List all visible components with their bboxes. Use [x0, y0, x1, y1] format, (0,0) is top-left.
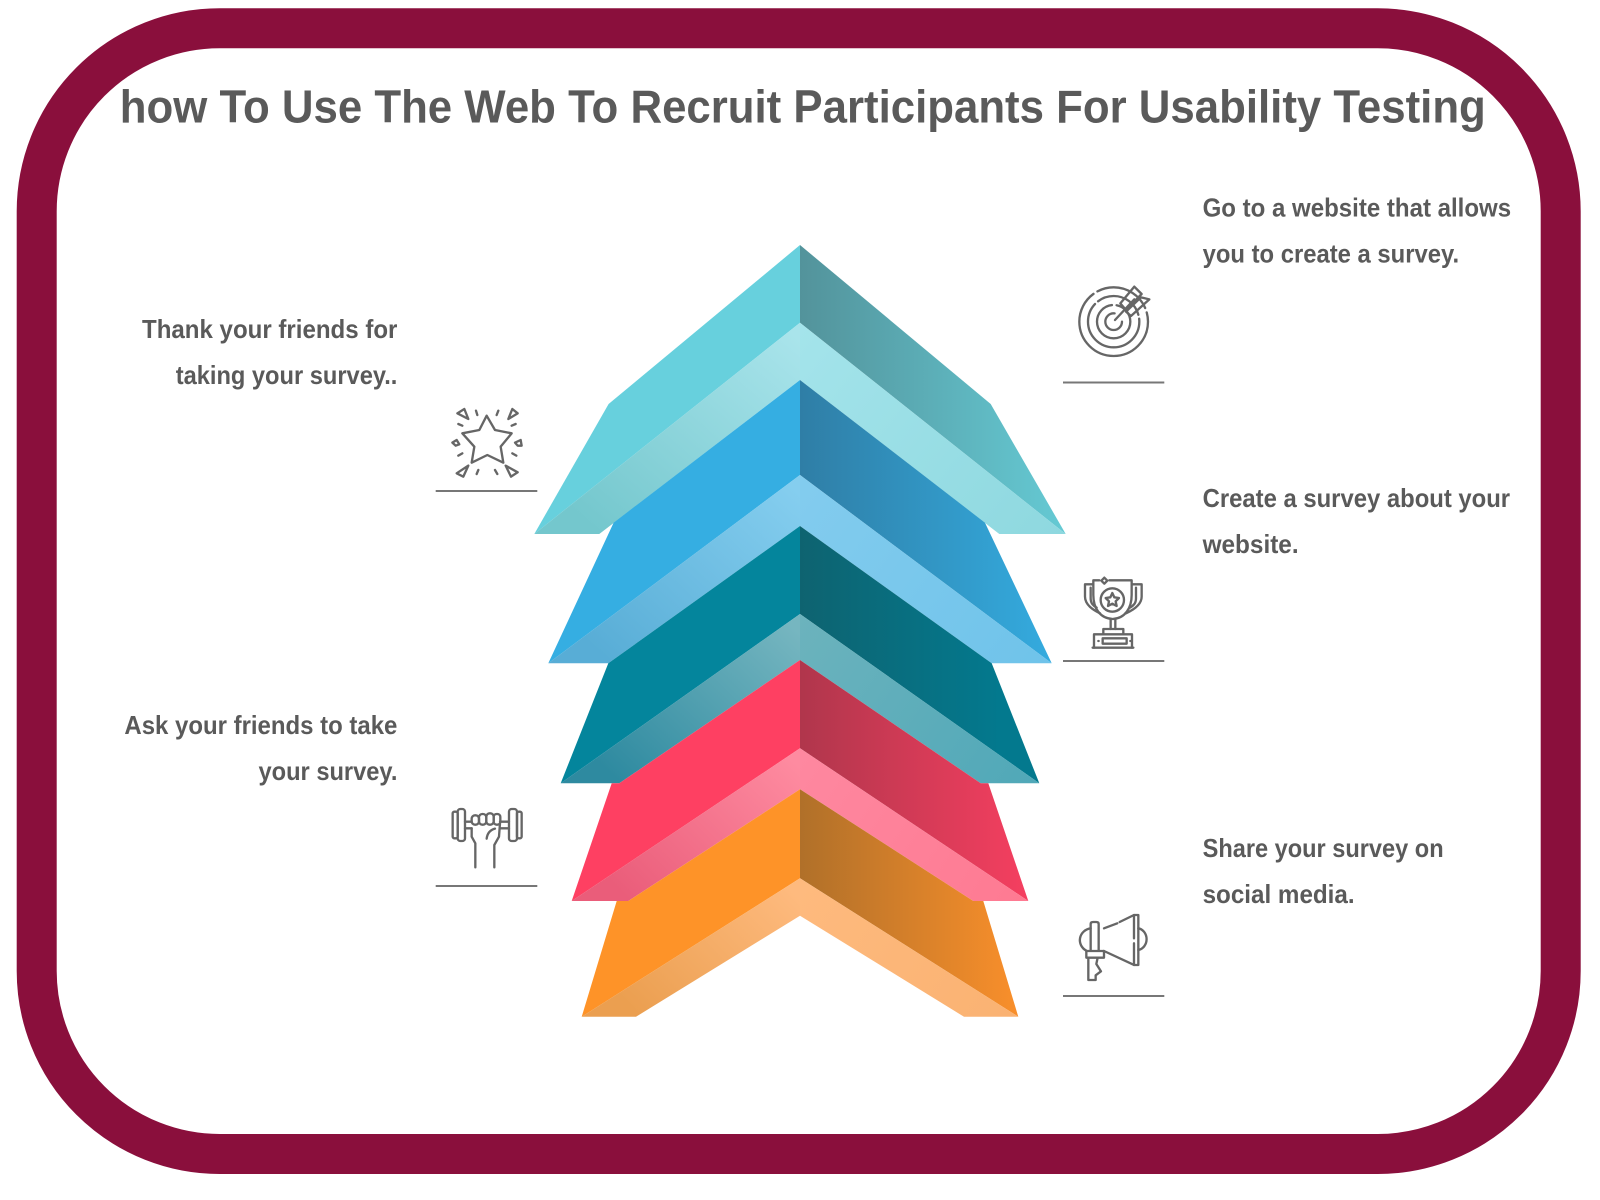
- chevron: sky blue: [548, 380, 1052, 663]
- step text: go to a website: [1203, 192, 1511, 268]
- step text: thank your friends: taking your survey..: [176, 360, 397, 390]
- step text: go to a website: Go to a website that allows: [1203, 192, 1511, 222]
- chevron stack: [534, 245, 1066, 1017]
- chevron: dark teal: [561, 526, 1039, 783]
- icon: target with arrow: [1079, 287, 1149, 356]
- step text: create a survey: Create a survey about your: [1203, 483, 1510, 513]
- icon: fist with dumbbell: [453, 809, 522, 867]
- step text: create a survey: website.: [1202, 529, 1299, 559]
- step text: ask your friends: Ask your friends to take: [124, 710, 397, 740]
- step text: go to a website: you to create a survey.: [1203, 238, 1459, 268]
- step text: share on social media: [1203, 833, 1444, 909]
- chevron: orange: [582, 789, 1018, 1017]
- icon: megaphone: [1080, 915, 1147, 980]
- icon: star with sparks: [452, 409, 522, 477]
- divider: dumbbell: [436, 885, 537, 887]
- divider: trophy: [1063, 660, 1164, 662]
- chevron: light teal: [534, 245, 1066, 534]
- step text: ask your friends: your survey.: [258, 756, 397, 786]
- step text: ask your friends: [124, 710, 397, 786]
- divider: target: [1063, 382, 1164, 384]
- step text: thank your friends: [142, 314, 397, 390]
- divider: star: [436, 490, 537, 492]
- title: how To Use The Web To Recruit Participants For Usability Testing: [120, 80, 1486, 132]
- divider: megaphone: [1063, 995, 1164, 997]
- step text: share on social media: Share your survey on: [1203, 833, 1444, 863]
- step text: share on social media: social media.: [1203, 879, 1355, 909]
- chevron: red: [572, 660, 1028, 901]
- icon: trophy: [1085, 578, 1142, 648]
- step text: create a survey: [1202, 483, 1510, 559]
- step text: thank your friends: Thank your friends for: [142, 314, 397, 344]
